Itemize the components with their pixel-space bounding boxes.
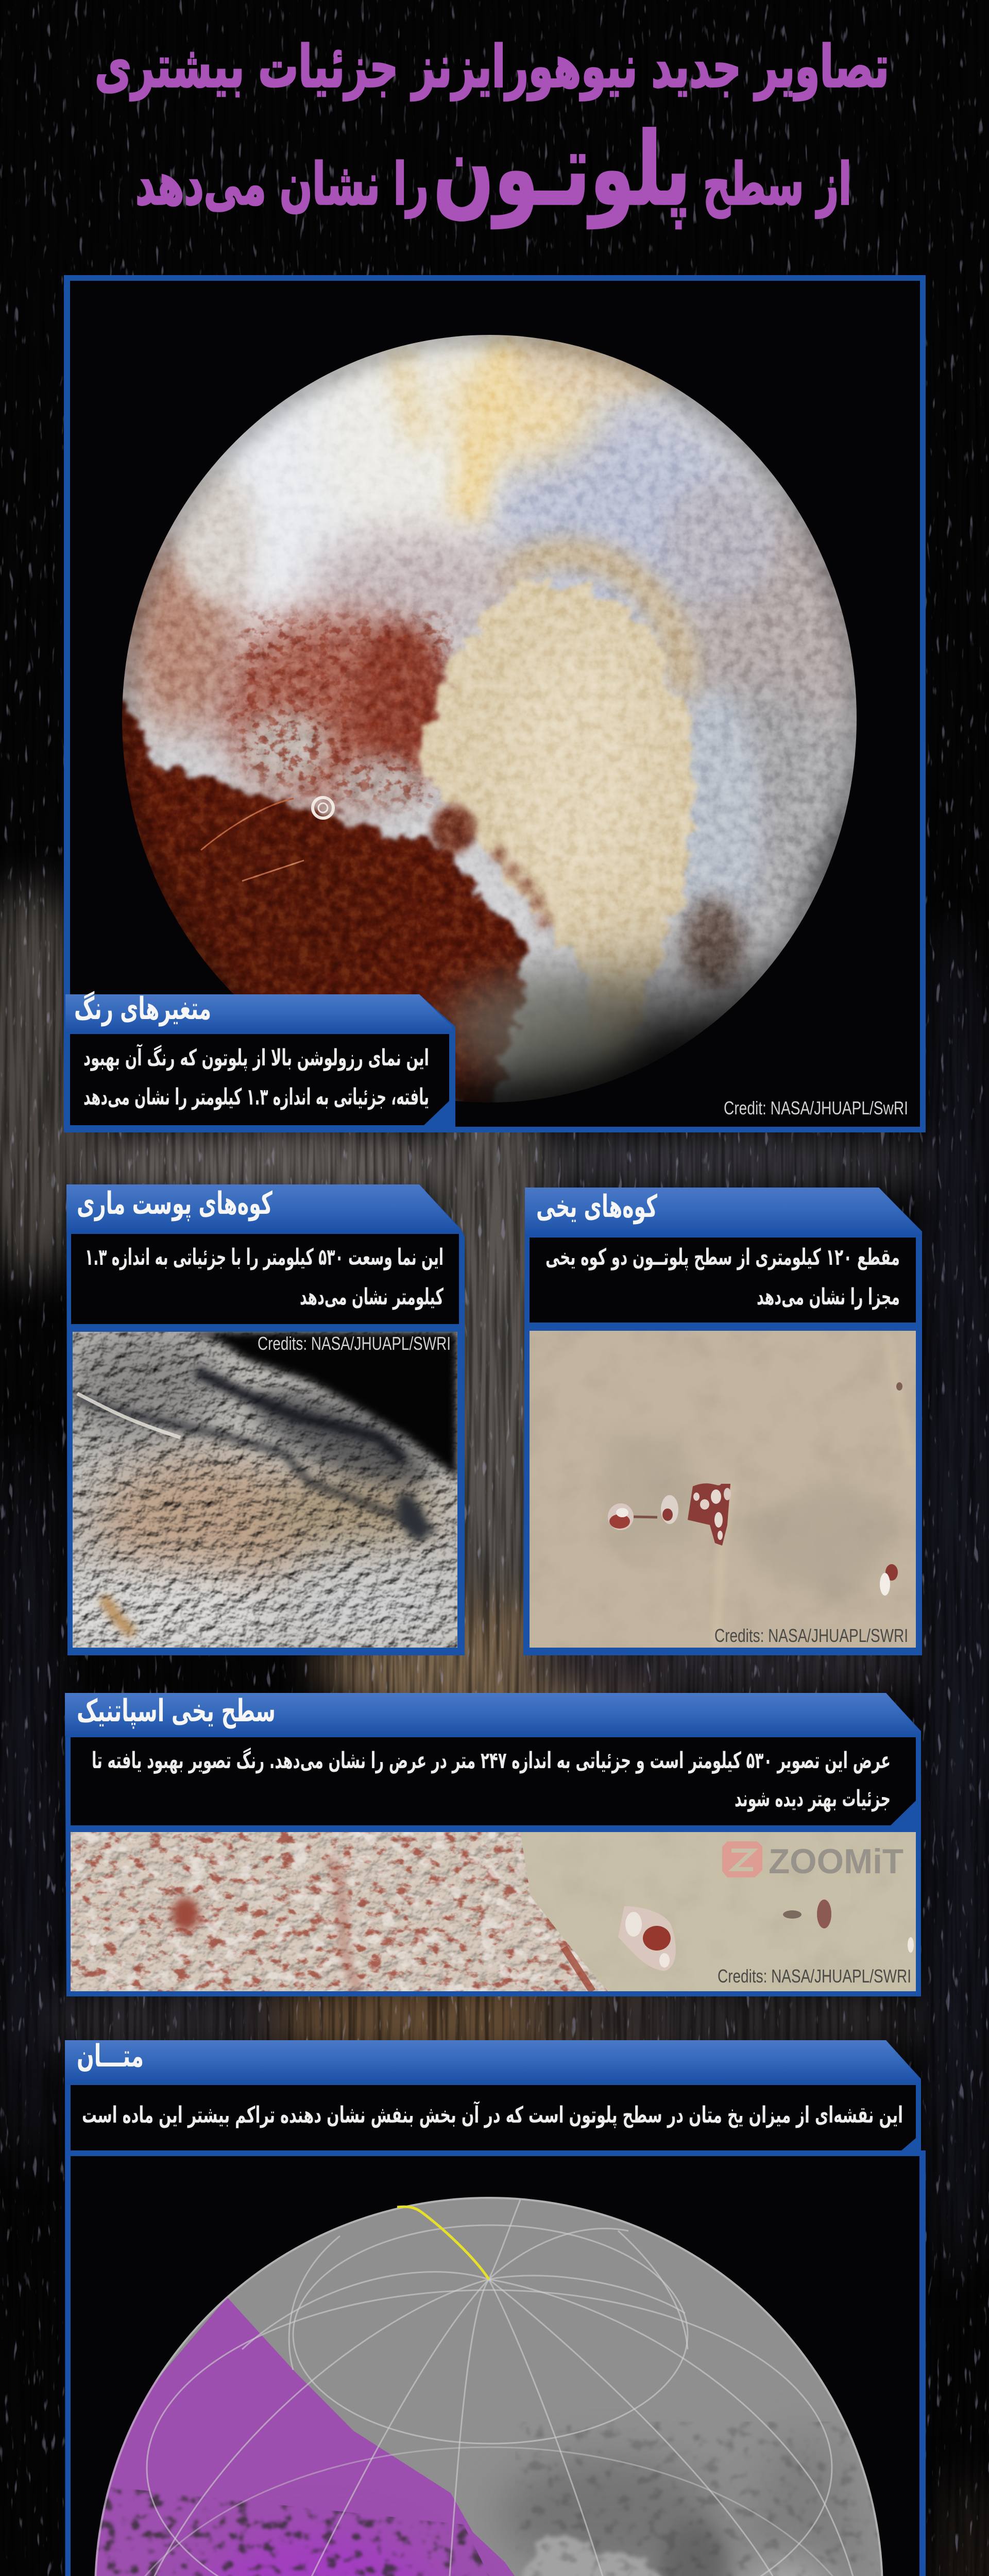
caption tab (64, 991, 455, 1132)
heart (419, 580, 696, 1061)
heading bar (525, 1188, 921, 1236)
description box: مقطع ۱۲۰ کیلومتری از سطح پلوتــون دو کوه یخی (545, 1244, 900, 1270)
image: sputnik plain (71, 1832, 916, 1991)
terminator shadow (500, 989, 989, 1175)
title: را نشان می‌دهد (135, 151, 429, 218)
panel: methane (65, 2038, 926, 2576)
description box: این نما وسعت ۵۳۰ کیلومتر را با جزئیاتی به اندازه ۱.۳ (85, 1244, 444, 1270)
sub-solar track (397, 2207, 489, 2279)
zoomit watermark: ZOOMiT (769, 1842, 903, 1881)
panel: sputnik icy plain (65, 1693, 921, 1996)
panel frame (65, 2040, 926, 2576)
credit: Credit: NASA/JHUAPL/SwRI (724, 1097, 908, 1118)
purple methane zone (77, 2287, 768, 2576)
title: پلوتـون (433, 111, 691, 229)
grid lines (97, 2200, 880, 2576)
description box: جزئیات بهتر دیده شوند (735, 1786, 891, 1812)
description box: عرض این تصویر ۵۳۰ کیلومتر است و جزئیاتی به اندازه ۲۴۷ متر در عرض را نشان می‌دهد. رنگ تصویر بهبود یافته تا (92, 1748, 891, 1774)
heading: متـــان (77, 2038, 144, 2074)
panel frame (523, 1188, 922, 1655)
description box: مجزا را نشان می‌دهد (757, 1284, 900, 1310)
caption tab: یافته، جزئیاتی به اندازه ۱.۳ کیلومتر را نشان می‌دهد (83, 1084, 429, 1110)
title: از سطح (703, 151, 851, 218)
panel: color variations (64, 275, 926, 1132)
image: snakeskin terrain (21, 1329, 469, 1659)
heading bar (66, 1184, 460, 1233)
grain texture (118, 330, 860, 1108)
heading: کوه‌های یخی (536, 1189, 657, 1225)
panel: snakeskin mountains (21, 1184, 469, 1659)
description box (71, 1234, 459, 1324)
heart south features (431, 805, 476, 854)
image: sputnik plain: Credits: NASA/JHUAPL/SWRI (718, 1965, 911, 1987)
caption tab: این نمای رزولوشن بالا از پلوتون که رنگ آن بهبود (83, 1043, 429, 1071)
globe: methane ice map (77, 2195, 891, 2576)
panel frame (64, 275, 926, 1132)
description box (71, 1737, 916, 1825)
crater (313, 798, 333, 818)
panel frame and heading tab (66, 1184, 465, 1655)
heading bar (65, 1693, 920, 1736)
title (95, 33, 889, 229)
red mid region (221, 613, 448, 799)
caption tab: متغیرهای رنگ (74, 991, 211, 1027)
description box (530, 1238, 916, 1323)
panel frame (65, 1693, 921, 1996)
heading bar (65, 2040, 920, 2084)
image: snakeskin terrain: Credits: NASA/JHUAPL/SWRI (258, 1333, 451, 1354)
image: pluto enhanced color (122, 335, 857, 1103)
image: ice plain with mountains: Credits: NASA/JHUAPL/SWRI (714, 1625, 908, 1646)
image: ice plain with mountains (530, 1331, 916, 1648)
description box (71, 2085, 916, 2150)
dark red belt (116, 693, 526, 1108)
heading: کوه‌های پوست ماری (77, 1185, 272, 1222)
heading: سطح یخی اسپاتنیک (77, 1693, 276, 1729)
panel: ice mountains (523, 1188, 922, 1655)
description box: کیلومتر نشان می‌دهد (300, 1284, 444, 1310)
